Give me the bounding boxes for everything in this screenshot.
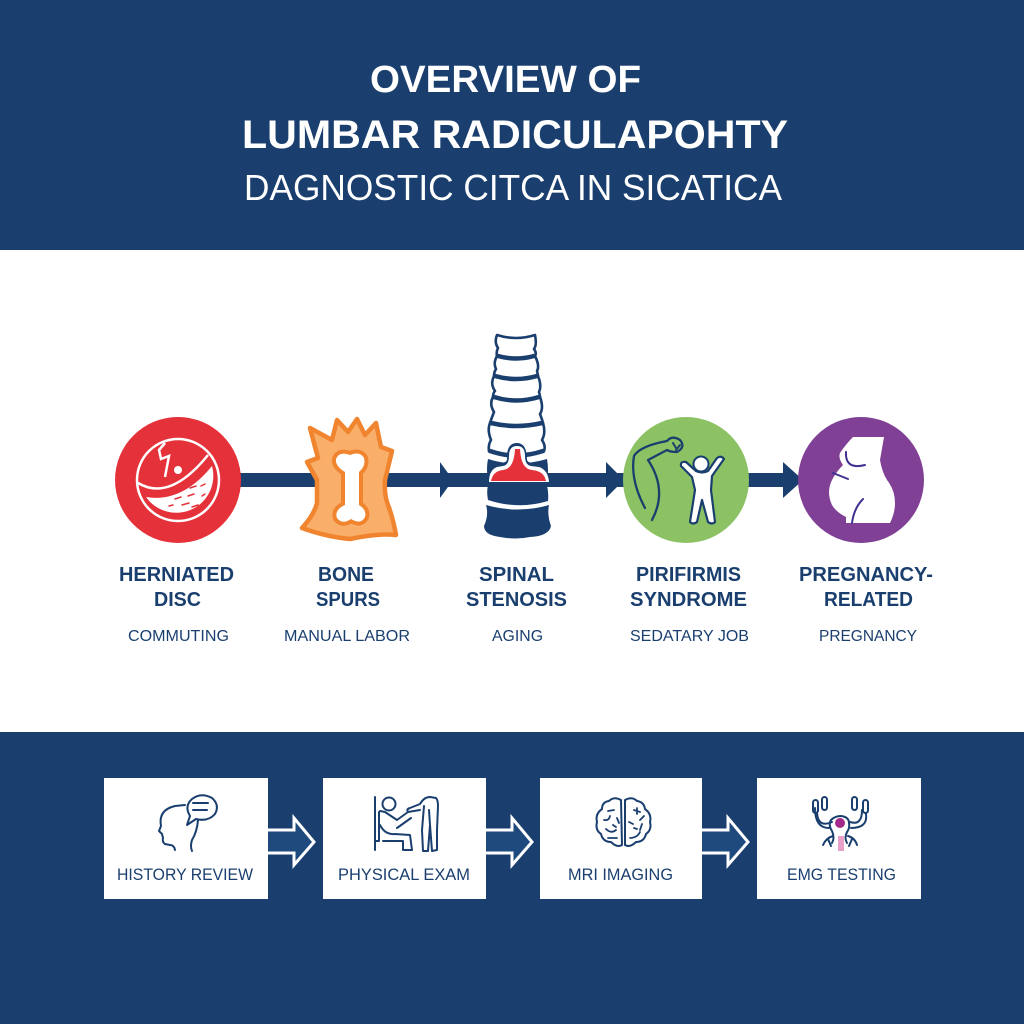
cause labels <box>119 564 933 645</box>
cause: piriformis syndrome: SYNDROME <box>630 589 747 611</box>
icon: exam figures <box>375 797 438 851</box>
title: OVERVIEW OF <box>370 59 641 101</box>
icon: spinal stenosis <box>484 335 551 538</box>
arrow: history to exam <box>268 818 314 865</box>
cause: bone spurs: BONE <box>318 564 374 586</box>
card: MRI imaging: MRI IMAGING <box>568 866 673 884</box>
arrow: exam to MRI <box>486 818 532 865</box>
cause: spinal stenosis: AGING <box>492 628 543 645</box>
title <box>242 59 788 157</box>
card: physical exam <box>323 778 486 899</box>
vertebra end-plate bands <box>490 356 543 456</box>
icon: head with speech bubble <box>159 795 217 851</box>
cause: herniated disc: HERNIATED <box>119 564 234 586</box>
icon: pregnancy <box>798 417 924 543</box>
cause: piriformis syndrome: SEDATARY JOB <box>630 628 749 645</box>
icon: herniated disc <box>115 417 241 543</box>
icon: EMG electrodes <box>813 797 868 851</box>
connector arrows <box>230 462 803 498</box>
subtitle: DAGNOSTIC CITCA IN SICATICA <box>244 167 782 208</box>
cause: pregnancy-related: PREGNANCY- <box>799 564 933 586</box>
icon: bone spur <box>302 419 396 539</box>
upper vertebrae <box>489 335 545 456</box>
cause: piriformis syndrome: PIRIFIRMIS <box>636 564 741 586</box>
icon: piriformis syndrome <box>623 417 749 543</box>
lower vertebrae <box>484 459 551 538</box>
canal compression <box>499 443 534 466</box>
cause: bone spurs: MANUAL LABOR <box>284 628 410 645</box>
cause: spinal stenosis: SPINAL <box>479 564 554 586</box>
card: physical exam: PHYSICAL EXAM <box>338 866 470 884</box>
icon: brain <box>596 798 650 846</box>
card: EMG testing: EMG TESTING <box>787 866 896 884</box>
diagnostic band <box>0 732 1024 1024</box>
card: MRI imaging <box>540 778 702 899</box>
cause: bone spurs <box>284 564 410 645</box>
cause: herniated disc: DISC <box>154 589 201 611</box>
header band <box>0 0 1024 250</box>
card: history review <box>104 778 268 899</box>
cause: spinal stenosis: STENOSIS <box>466 589 567 611</box>
cause: pregnancy-related: PREGNANCY <box>819 628 917 645</box>
cause: bone spurs: SPURS <box>316 589 380 611</box>
cause: spinal stenosis <box>466 564 567 645</box>
arrow: MRI to EMG <box>702 818 748 865</box>
cause: piriformis syndrome <box>630 564 749 645</box>
card: EMG testing <box>757 778 921 899</box>
cause: herniated disc <box>119 564 234 645</box>
title: LUMBAR RADICULAPOHTY <box>242 113 788 157</box>
cause: herniated disc: COMMUTING <box>128 628 229 645</box>
cause: pregnancy-related <box>799 564 933 645</box>
card: history review: HISTORY REVIEW <box>117 866 253 884</box>
cause: pregnancy-related: RELATED <box>824 589 913 611</box>
